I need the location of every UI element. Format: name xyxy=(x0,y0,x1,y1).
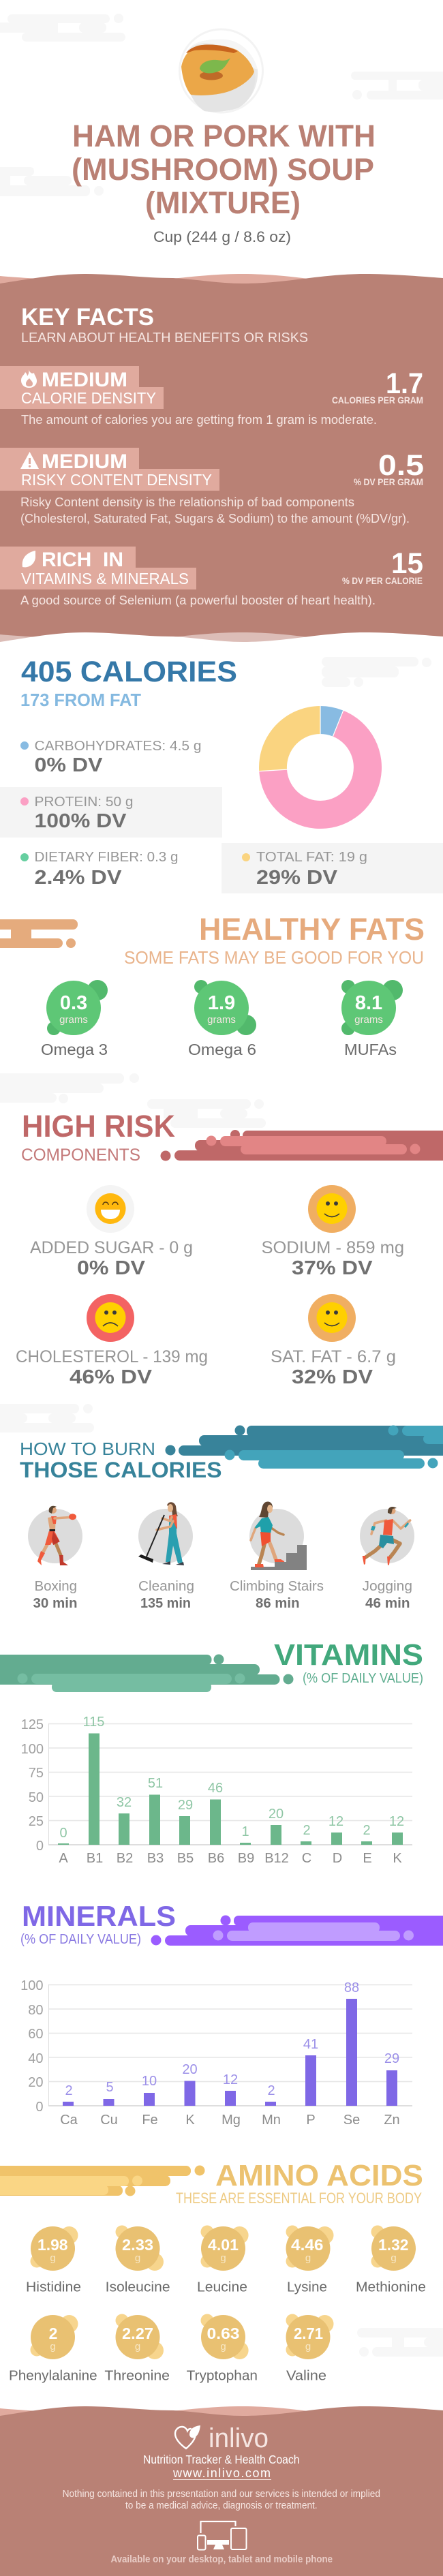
amino: isoleucine xyxy=(106,2226,170,2295)
heading: amino acids: AMINO ACIDS xyxy=(215,2159,423,2192)
amino: tryptophan: 0.63 xyxy=(207,2325,240,2342)
vitamins and minerals block: VITAMINS & MINERALS xyxy=(21,570,189,587)
calorie density block: 1.7 xyxy=(386,367,423,400)
heading: calories: 405 CALORIES xyxy=(21,656,237,688)
risk: saturated fat: 32% DV xyxy=(292,1366,373,1388)
title: (MUSHROOM) SOUP xyxy=(72,152,374,187)
icon: flame xyxy=(21,369,37,388)
logo xyxy=(175,2423,269,2453)
vitamins and minerals block: A good source of Selenium (a powerful booster of heart health). xyxy=(20,594,376,607)
disclaimer: to be a medical advice, diagnosis or treatment. xyxy=(125,2500,318,2511)
amino: isoleucine: g xyxy=(135,2252,140,2264)
decoration: healthy fats banner xyxy=(0,919,78,948)
bar chart: vitamins: A xyxy=(59,1851,68,1866)
amino: valine: 2.71 xyxy=(294,2325,323,2342)
legend: dietary fiber: 2.4% DV xyxy=(34,867,122,889)
badge: omega 3: 0.3 xyxy=(60,992,87,1014)
amino: valine xyxy=(286,2314,334,2384)
risky content density block xyxy=(0,448,424,525)
amino: leucine: g xyxy=(220,2252,226,2264)
badge: omega 3: grams xyxy=(59,1014,88,1026)
amino: threonine: 2.27 xyxy=(122,2325,153,2342)
heading: minerals: MINERALS xyxy=(22,1900,176,1932)
legend: dietary fiber: DIETARY FIBER: 0.3 g xyxy=(34,849,179,865)
amino: methionine: 1.32 xyxy=(378,2236,409,2254)
badge: MUFAs: grams xyxy=(354,1014,383,1026)
badge: omega 3: Omega 3 xyxy=(41,1041,108,1058)
legend: protein: PROTEIN: 50 g xyxy=(34,794,134,810)
risky content density block: (Cholesterol, Saturated Fat, Sugars & Sodium) to the amount (%DV/gr). xyxy=(20,512,410,525)
risk: added sugar: ADDED SUGAR - 0 g xyxy=(30,1238,193,1257)
bar chart: vitamins: 46 xyxy=(208,1781,223,1796)
heading: how to burn those calories: HOW TO BURN xyxy=(20,1439,155,1459)
bar chart: vitamins: 0 xyxy=(59,1826,67,1841)
heading: vitamins: VITAMINS xyxy=(274,1638,423,1672)
legend: total fat xyxy=(222,843,443,893)
bar chart: minerals: Cu xyxy=(100,2113,118,2128)
bar chart: vitamins: 25 xyxy=(29,1814,44,1829)
legend: dietary fiber xyxy=(20,849,179,889)
activity: boxing xyxy=(28,1506,82,1611)
amino: methionine xyxy=(356,2226,426,2295)
bar chart: minerals: 5 xyxy=(106,2080,114,2095)
bar chart: minerals: Mn xyxy=(262,2113,281,2128)
bar chart: vitamins: E xyxy=(363,1851,372,1866)
panel: key facts xyxy=(0,274,443,647)
risky content density block: 0.5 xyxy=(378,449,424,482)
amino: tryptophan xyxy=(187,2314,258,2384)
availability note: Available on your desktop, tablet and mobile phone xyxy=(110,2554,333,2565)
risk: added sugar xyxy=(30,1185,193,1279)
bar chart: minerals xyxy=(20,1978,412,2128)
icon: warning triangle xyxy=(20,452,39,469)
heading: healthy fats: HEALTHY FATS xyxy=(199,912,425,947)
vitamins and minerals block: 15 xyxy=(391,547,423,580)
calorie density block xyxy=(0,366,423,427)
amino: histidine: Histidine xyxy=(26,2280,81,2295)
legend: total fat: 29% DV xyxy=(256,867,338,889)
logo: inlivo xyxy=(209,2423,269,2453)
activity: jogging xyxy=(360,1507,414,1611)
bar chart: minerals: Mg xyxy=(222,2113,241,2128)
amino: valine: g xyxy=(305,2341,311,2352)
subheading: vitamins: (% OF DAILY VALUE) xyxy=(303,1671,423,1686)
badge: MUFAs: MUFAs xyxy=(344,1041,397,1058)
bar chart: minerals: 20 xyxy=(182,2062,198,2077)
risky content density block: % DV PER GRAM xyxy=(354,476,423,487)
amino: lysine: g xyxy=(305,2252,311,2264)
badge: omega 6: Omega 6 xyxy=(188,1041,256,1058)
disclaimer xyxy=(63,2488,380,2511)
heading: high risk: HIGH RISK xyxy=(22,1109,175,1144)
bar chart: minerals: 29 xyxy=(384,2051,399,2066)
amino: threonine: Threonine xyxy=(104,2369,170,2384)
calorie density block: MEDIUM xyxy=(42,369,127,391)
badge: omega 6: 1.9 xyxy=(208,992,235,1014)
activity: jogging: Jogging xyxy=(363,1579,412,1594)
amino: lysine: 4.46 xyxy=(291,2236,323,2254)
amino: tryptophan: g xyxy=(220,2341,226,2352)
amino: phenylalanine: Phenylalanine xyxy=(9,2369,97,2384)
bar chart: vitamins: B9 xyxy=(238,1851,254,1866)
badge: MUFAs: 8.1 xyxy=(355,992,382,1014)
risk: sodium xyxy=(262,1185,404,1279)
amino: leucine xyxy=(197,2226,249,2295)
activity: boxing: Boxing xyxy=(34,1579,77,1594)
amino: isoleucine: 2.33 xyxy=(122,2236,153,2254)
bar chart: vitamins: 100 xyxy=(21,1742,44,1757)
bar chart: vitamins: 75 xyxy=(29,1766,44,1781)
decoration: vitamins banner xyxy=(0,1655,293,1692)
bar chart: minerals: 2 xyxy=(267,2083,275,2098)
panel: footer xyxy=(0,2406,443,2576)
amino: phenylalanine: 2 xyxy=(49,2325,57,2342)
bar chart: vitamins: 115 xyxy=(83,1715,104,1730)
bar chart: minerals: 2 xyxy=(65,2083,73,2098)
heading: how to burn those calories xyxy=(20,1439,222,1482)
bar chart: vitamins: D xyxy=(333,1851,342,1866)
subheading: healthy fats: SOME FATS MAY BE GOOD FOR YOU xyxy=(124,947,424,968)
bar chart: minerals: Zn xyxy=(384,2113,400,2128)
bar chart: minerals: P xyxy=(306,2113,316,2128)
subheading: minerals: (% OF DAILY VALUE) xyxy=(20,1932,141,1947)
bar chart: minerals: 40 xyxy=(28,2051,44,2066)
risk: sodium: SODIUM - 859 mg xyxy=(262,1238,404,1257)
legend: protein xyxy=(0,787,222,838)
bar chart: minerals: Fe xyxy=(142,2113,158,2128)
bar chart: vitamins: 50 xyxy=(29,1790,44,1805)
icon: leaf xyxy=(22,551,35,567)
badge: omega 6 xyxy=(188,980,256,1058)
risk: saturated fat xyxy=(271,1294,396,1388)
amino: isoleucine: Isoleucine xyxy=(106,2280,170,2295)
risky content density block: MEDIUM xyxy=(42,450,127,473)
amino: threonine: g xyxy=(135,2341,140,2352)
bar chart: vitamins: 29 xyxy=(178,1798,193,1813)
bar chart: vitamins: B12 xyxy=(264,1851,289,1866)
risk: sodium: 37% DV xyxy=(292,1257,373,1279)
bar chart: vitamins: C xyxy=(302,1851,311,1866)
bar chart: minerals: Ca xyxy=(60,2113,78,2128)
bar chart: vitamins: 0 xyxy=(36,1839,44,1854)
legend: total fat: TOTAL FAT: 19 g xyxy=(256,849,367,865)
calorie density block: CALORIES PER GRAM xyxy=(332,395,423,405)
legend: carbohydrates: CARBOHYDRATES: 4.5 g xyxy=(34,738,202,754)
amino: leucine: 4.01 xyxy=(208,2236,239,2254)
bar chart: minerals: 88 xyxy=(344,1980,359,1995)
amino: valine: Valine xyxy=(286,2369,326,2384)
badge: omega 3 xyxy=(41,980,108,1058)
amino: tryptophan: Tryptophan xyxy=(187,2369,258,2384)
bar chart: vitamins: 51 xyxy=(148,1776,163,1791)
subheading: LEARN ABOUT HEALTH BENEFITS OR RISKS xyxy=(21,330,308,346)
bar chart: vitamins xyxy=(21,1715,412,1866)
bar chart: vitamins: 12 xyxy=(329,1814,343,1829)
legend: protein: 100% DV xyxy=(34,810,127,832)
activity: cleaning: 135 min xyxy=(140,1596,191,1611)
vitamins and minerals block xyxy=(0,547,423,607)
bar chart: minerals: 100 xyxy=(20,1978,44,1993)
legend: carbohydrates: 0% DV xyxy=(34,754,103,776)
amino: lysine xyxy=(286,2226,334,2295)
vitamins and minerals block: % DV PER CALORIE xyxy=(342,575,423,586)
website: www.inlivo.com xyxy=(172,2466,271,2480)
risky content density block: Risky Content density is the relationship of bad components xyxy=(20,495,354,509)
heading: key facts: KEY FACTS xyxy=(21,304,154,331)
amino: histidine: g xyxy=(50,2252,56,2264)
risk: cholesterol xyxy=(16,1294,208,1388)
risky content density block: RISKY CONTENT DENSITY xyxy=(21,471,212,489)
amino: leucine: Leucine xyxy=(197,2280,247,2295)
badge: MUFAs xyxy=(341,980,403,1058)
activity: boxing: 30 min xyxy=(33,1596,78,1611)
calorie density block: CALORIE DENSITY xyxy=(21,389,156,407)
amino: lysine: Lysine xyxy=(287,2280,327,2295)
activity: cleaning: Cleaning xyxy=(138,1579,194,1594)
risk: added sugar: 0% DV xyxy=(77,1257,146,1279)
decoration: high risk banner xyxy=(161,1130,443,1161)
activity: jogging: 46 min xyxy=(365,1596,410,1611)
bar chart: minerals: 60 xyxy=(28,2027,44,2042)
bar chart: vitamins: 32 xyxy=(117,1795,132,1810)
legend: carbohydrates xyxy=(20,738,202,776)
bar chart: vitamins: 125 xyxy=(21,1717,44,1732)
heading: how to burn those calories: THOSE CALORIES xyxy=(20,1458,222,1482)
bar chart: vitamins: B2 xyxy=(117,1851,133,1866)
amino: phenylalanine xyxy=(9,2315,97,2384)
bar chart: vitamins: 2 xyxy=(363,1823,371,1838)
bar chart: vitamins: 12 xyxy=(389,1814,404,1829)
subheading: from fat: 173 FROM FAT xyxy=(20,690,141,710)
bar chart: vitamins: B5 xyxy=(177,1851,194,1866)
decoration: minerals banner xyxy=(151,1915,443,1946)
bar chart: minerals: 0 xyxy=(35,2100,44,2115)
bar chart: minerals: Se xyxy=(343,2113,360,2128)
bar chart: minerals: 12 xyxy=(223,2072,238,2087)
bar chart: minerals: 80 xyxy=(28,2003,44,2018)
title: (MIXTURE) xyxy=(145,185,301,220)
icon: soup bowl xyxy=(180,29,263,112)
disclaimer: Nothing contained in this presentation and our services is intended or implied xyxy=(63,2488,380,2500)
serving size: Cup (244 g / 8.6 oz) xyxy=(153,228,291,245)
icon: devices xyxy=(198,2521,247,2550)
bar chart: vitamins: B3 xyxy=(147,1851,164,1866)
amino: methionine: Methionine xyxy=(356,2280,426,2295)
bar chart: vitamins: B6 xyxy=(208,1851,224,1866)
risk: cholesterol: CHOLESTEROL - 139 mg xyxy=(16,1347,208,1366)
bar chart: vitamins: 2 xyxy=(303,1823,311,1838)
bar chart: vitamins: 1 xyxy=(241,1824,249,1839)
calorie density block: The amount of calories you are getting from 1 gram is moderate. xyxy=(21,413,377,427)
bar chart: minerals: 20 xyxy=(28,2075,44,2090)
bar chart: vitamins: K xyxy=(393,1851,402,1866)
subheading: components: COMPONENTS xyxy=(21,1146,140,1165)
bar chart: minerals: 10 xyxy=(142,2074,157,2089)
vitamins and minerals block: RICH IN xyxy=(42,549,123,571)
tagline: Nutrition Tracker & Health Coach xyxy=(143,2453,300,2466)
bar chart: minerals: K xyxy=(185,2113,195,2128)
activity: climbing stairs: 86 min xyxy=(256,1596,300,1611)
risk: saturated fat: SAT. FAT - 6.7 g xyxy=(271,1347,396,1366)
title: HAM OR PORK WITH xyxy=(72,119,376,153)
decoration: burn banner xyxy=(165,1426,443,1469)
bar chart: vitamins: 20 xyxy=(269,1807,284,1822)
activity: climbing stairs xyxy=(230,1501,324,1611)
amino: histidine: 1.98 xyxy=(37,2236,68,2254)
bar chart: vitamins: B1 xyxy=(87,1851,103,1866)
amino: histidine xyxy=(26,2226,81,2295)
activity: climbing stairs: Climbing Stairs xyxy=(230,1579,324,1594)
risk: cholesterol: 46% DV xyxy=(70,1366,153,1388)
donut chart xyxy=(259,706,382,829)
decoration: amino acids banner xyxy=(0,2166,204,2196)
title xyxy=(72,119,376,220)
activity: cleaning xyxy=(138,1502,194,1611)
badge: omega 6: grams xyxy=(207,1014,236,1026)
amino: phenylalanine: g xyxy=(50,2341,56,2352)
bar chart: minerals: 41 xyxy=(303,2037,318,2052)
amino: threonine xyxy=(104,2314,170,2384)
amino: methionine: g xyxy=(391,2252,397,2264)
